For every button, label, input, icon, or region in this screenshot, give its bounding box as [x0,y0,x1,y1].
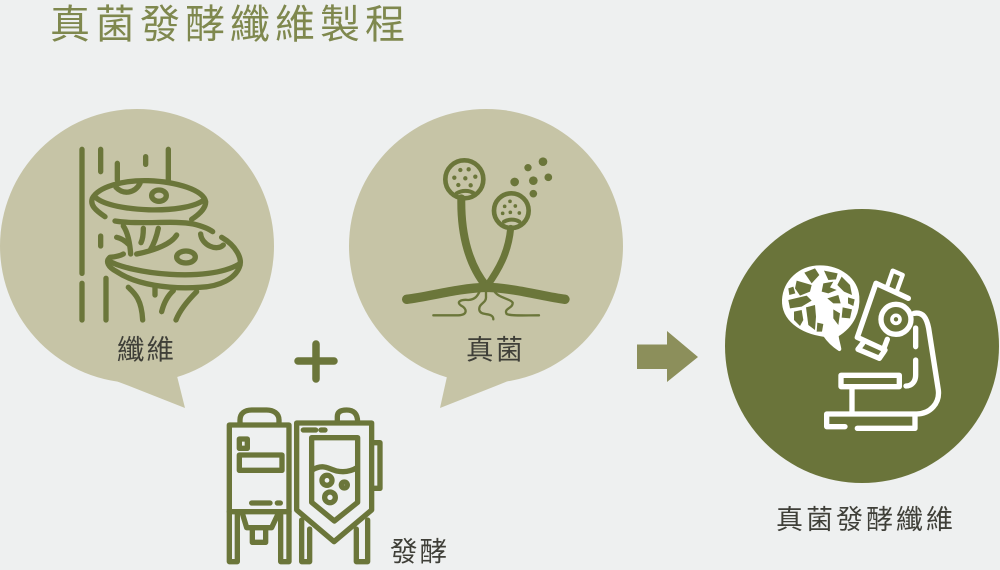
icon: fermentation tanks [229,410,380,562]
magnified fibre bubble [784,267,857,349]
panel: fiber speech bubble [0,109,274,408]
label: fungus: 真菌 [466,334,525,365]
panel: result circle [725,209,999,483]
icon: mushrooms on tree [82,149,240,320]
label: fungal fermented fiber: 真菌發酵纖維 [776,505,956,535]
icon: plus [298,344,334,379]
title: 真菌發酵纖維製程 [50,3,410,47]
label: fermentation: 發酵 [390,536,449,567]
icon: microscope [784,267,938,428]
label: fiber: 纖維 [117,334,176,365]
icon: fungus sporangia [407,157,565,319]
panel: fungus speech bubble [349,109,623,408]
arrow [637,331,698,382]
